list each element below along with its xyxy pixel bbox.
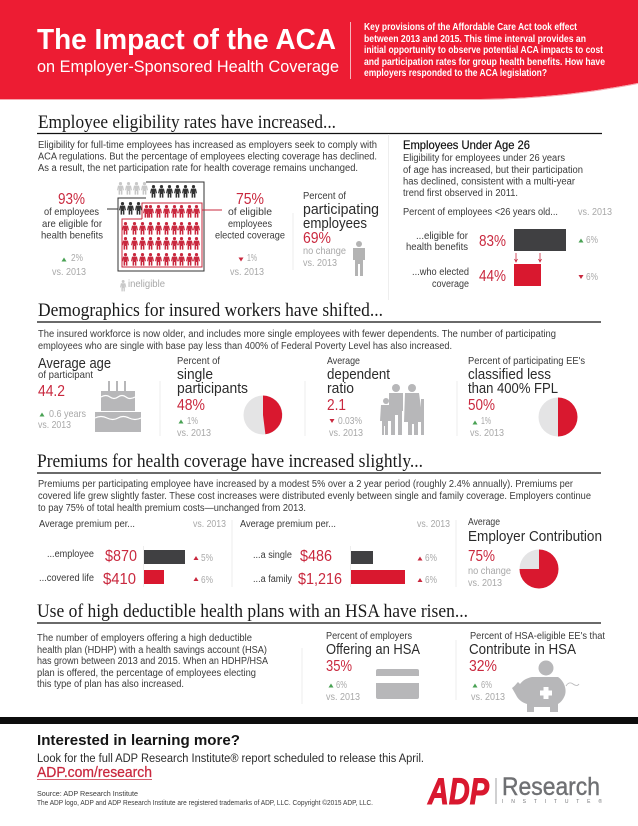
legend: ineligible <box>120 278 165 291</box>
section 1 body text <box>38 140 377 174</box>
section 2 body text: The insured workforce is now older, and includes more single employees with fewer dependents. The number of participating <box>38 329 556 340</box>
icon: family <box>380 384 424 435</box>
panel: employees under age 26: 44% <box>479 268 506 285</box>
bar: eligible <box>514 229 566 251</box>
footer call to action: Look for the full ADP Research Institute® report scheduled to release this April. <box>37 753 424 765</box>
logo: ADP Research Institute: ADP <box>427 771 489 812</box>
stat: employer contribution: Employer Contribution <box>468 529 602 545</box>
chart: premium per employee: $870 <box>105 548 137 565</box>
stat: single participants: single <box>177 367 213 383</box>
header intro text: employers responded to the ACA legislation? <box>364 68 547 79</box>
chart: premium per employee: ...covered life <box>39 573 94 584</box>
stat: single participants <box>177 355 282 439</box>
icon: piggy bank <box>512 660 579 712</box>
header intro text: and participation rates for group health benefits. How have <box>364 57 605 68</box>
pie chart: 75% <box>520 550 558 588</box>
header intro text: initial opportunity to observe potential ACA impacts to cost <box>364 45 604 56</box>
stat: average age: of participant <box>38 369 93 381</box>
chart: premium per employee: vs. 2013 <box>193 518 226 530</box>
panel: employees under age 26 <box>403 138 612 290</box>
panel: employees under age 26: Employees Under Age 26 <box>403 138 530 152</box>
chart: premium per coverage type: Average premium per... <box>240 519 336 530</box>
stat: average age: 0.6 years <box>49 408 86 420</box>
pie chart: 50% <box>538 398 578 436</box>
stat: classified less than 400% FPL: 1% <box>481 415 491 427</box>
stat: participating employees 69%: 69% <box>303 230 331 247</box>
stat: participating employees 69%: vs. 2013 <box>303 257 337 269</box>
stat: classified less than 400% FPL: Percent of participating EE's <box>468 355 585 367</box>
chart: premium per coverage type: 6% <box>425 574 437 586</box>
chart: premium per employee <box>39 518 226 588</box>
stat: 75% elected: employees <box>228 218 272 230</box>
stat: single participants: 48% <box>177 397 205 414</box>
bar: covered life <box>144 570 164 584</box>
footer source notes: Source: ADP Research Institute <box>37 789 138 798</box>
bar: employee <box>144 550 185 564</box>
stat: contribute in HSA <box>469 630 605 712</box>
stat: offering an HSA: Offering an HSA <box>326 642 420 658</box>
chart: premium per coverage type: 6% <box>425 552 437 564</box>
chart: premium per coverage type <box>240 518 450 588</box>
stat: employer contribution: no change <box>468 565 511 577</box>
subtitle: on Employer-Sponsored Health Coverage <box>37 57 339 76</box>
section 3 heading: Premiums for health coverage have increased slightly... <box>37 452 423 472</box>
panel: employees under age 26: has declined, consistent with a multi-year <box>403 176 576 188</box>
stat: classified less than 400% FPL <box>468 355 585 439</box>
section 4 body text <box>37 633 268 690</box>
stat: participating employees 69%: no change <box>303 245 346 257</box>
header intro text <box>364 22 605 79</box>
stat: average age: Average age <box>38 356 111 372</box>
chart: premium per coverage type: ...a family <box>253 574 292 585</box>
chart: premium per employee: 5% <box>201 552 213 564</box>
section 3 body text: Premiums per participating employee have increased by a modest 5% over a 2 year period (roughly 2.4% annually). Premiums per <box>38 479 574 490</box>
stat: 75% elected <box>215 191 285 278</box>
section 3 body text <box>38 479 591 514</box>
stat: dependent ratio: Average <box>327 355 360 367</box>
chart: premium per coverage type: $1,216 <box>298 571 342 588</box>
stat: contribute in HSA: Percent of HSA-eligible EE's that <box>470 630 605 642</box>
stat: classified less than 400% FPL: vs. 2013 <box>470 427 504 439</box>
section 1 heading: Employee eligibility rates have increased... <box>38 113 336 133</box>
header intro text: Key provisions of the Affordable Care Act took effect <box>364 22 578 33</box>
chart: premium per employee: Average premium per... <box>39 519 135 530</box>
logo: ADP Research Institute: Research <box>502 773 600 801</box>
footer call to action: Interested in learning more? <box>37 732 240 749</box>
stat: employer contribution: 75% <box>468 548 495 565</box>
chart: premium per employee: $410 <box>103 571 136 588</box>
legend: ineligible: ineligible <box>128 278 165 290</box>
panel: employees under age 26: coverage <box>432 279 469 290</box>
chart: premium per coverage type: ...a single <box>253 550 292 561</box>
stat: 93% eligible <box>41 191 103 278</box>
stat: contribute in HSA: Contribute in HSA <box>469 642 576 658</box>
icon: person <box>353 241 365 276</box>
stat: dependent ratio: vs. 2013 <box>329 427 363 439</box>
chart: premium per employee: 6% <box>201 574 213 586</box>
section 4 body text: this type of plan has also increased. <box>37 679 184 690</box>
stat: 75% elected: of eligible <box>228 206 272 218</box>
stat: 75% elected: elected coverage <box>215 230 285 242</box>
section 2 heading: Demographics for insured workers have shifted... <box>38 301 383 321</box>
section 1 body text: As a result, the net participation rate for health coverage remains unchanged. <box>38 163 358 174</box>
stat: classified less than 400% FPL: 50% <box>468 397 495 414</box>
stat: average age: 44.2 <box>38 383 65 400</box>
panel: employees under age 26: 6% <box>586 234 598 246</box>
stat: employer contribution <box>468 517 602 589</box>
panel: employees under age 26: Percent of employees <26 years old... <box>403 207 558 218</box>
stat: offering an HSA: 6% <box>336 679 347 691</box>
stat: single participants: 1% <box>187 415 198 427</box>
panel: employees under age 26: vs. 2013 <box>578 206 612 218</box>
stat: 75% elected: 1% <box>247 252 257 264</box>
stat: contribute in HSA: 32% <box>469 658 497 675</box>
chart: premium per employee: ...employee <box>47 549 94 560</box>
stat: offering an HSA: Percent of employers <box>326 630 412 642</box>
stat: single participants: participants <box>177 381 248 397</box>
stat: employer contribution: Average <box>468 517 500 528</box>
stat: dependent ratio: 0.03% <box>338 415 362 427</box>
bar: family <box>351 570 405 584</box>
icon: credit card <box>376 669 419 699</box>
stat: 93% eligible: vs. 2013 <box>52 266 86 278</box>
section 1 body text: ACA regulations. But the percentage of employees electing coverage has declined. <box>38 152 377 162</box>
stat: 93% eligible: 2% <box>71 252 83 264</box>
pie chart: 48% <box>244 396 282 434</box>
stat: 93% eligible: of employees <box>44 206 99 218</box>
stat: dependent ratio: dependent <box>327 367 390 383</box>
panel: employees under age 26: ...who elected <box>412 267 469 278</box>
stat: 93% eligible: health benefits <box>41 230 103 242</box>
section 1 body text: Eligibility for full-time employees has increased as employers seek to comply with <box>38 140 377 151</box>
stat: participating employees 69%: participating <box>303 202 379 218</box>
stat: contribute in HSA: 6% <box>481 679 492 691</box>
stat: participating employees 69%: Percent of <box>303 190 346 202</box>
panel: employees under age 26: 83% <box>479 233 506 250</box>
header banner <box>0 0 638 100</box>
section 2 body text: employees who are single with base pay less than 400% of Federal Poverty Level has also increased. <box>38 341 452 352</box>
section 4 body text: health plan (HDHP) with a health savings account (HSA) <box>37 645 267 656</box>
stat: 93% eligible: are eligible for <box>42 218 102 230</box>
panel: employees under age 26: trend first observed in 2011. <box>403 188 518 199</box>
section 4 body text: plan is offered, the percentage of employees electing <box>37 668 256 679</box>
stat: offering an HSA: vs. 2013 <box>326 691 360 703</box>
stat: classified less than 400% FPL: than 400% FPL <box>468 381 558 397</box>
section 3 body text: covered life grew slightly faster. These cost increases were distributed evenly between single and family coverage. Employers continue <box>38 491 591 502</box>
footer source notes <box>37 789 373 807</box>
footer source notes: The ADP logo, ADP and ADP Research Institute are registered trademarks of ADP, LLC. Copyright ©2015 ADP, LLC. <box>37 798 373 807</box>
stat: average age <box>38 356 141 432</box>
stat: participating employees 69% <box>303 190 379 276</box>
stat: single participants: vs. 2013 <box>177 427 211 439</box>
bar: single <box>351 551 373 564</box>
section 4 heading: Use of high deductible health plans with an HSA have risen... <box>37 602 468 622</box>
stat: 75% elected: 75% <box>236 191 264 208</box>
panel: employees under age 26: of age has increased, but their participation <box>403 165 583 176</box>
stat: employer contribution: vs. 2013 <box>468 577 502 589</box>
logo: ADP Research Institute <box>427 771 602 812</box>
stat: average age: vs. 2013 <box>38 419 71 431</box>
chart: premium per coverage type: vs. 2013 <box>417 518 450 530</box>
stat: dependent ratio <box>327 355 424 439</box>
footer band <box>0 717 638 724</box>
pictogram: employee grid <box>107 182 222 271</box>
section 4 body text: has grown between 2013 and 2015. When an HDHP/HSA <box>37 656 268 667</box>
title: The Impact of the ACA <box>37 24 336 56</box>
chart: premium per coverage type: $486 <box>300 548 332 565</box>
section 2 body text <box>38 329 556 352</box>
logo: ADP Research Institute: INSTITUTE® <box>502 798 602 805</box>
panel: employees under age 26: ...eligible for <box>416 231 469 242</box>
section 4 body text: The number of employers offering a high deductible <box>37 633 252 644</box>
stat: classified less than 400% FPL: classified less <box>468 367 551 383</box>
bar: elected <box>514 264 541 286</box>
stat: single participants: Percent of <box>177 355 220 367</box>
panel: employees under age 26: health benefits <box>406 242 468 253</box>
stat: dependent ratio: 2.1 <box>327 397 346 414</box>
footer call to action <box>37 732 424 781</box>
header intro text: between 2013 and 2015. This time interval provides an <box>364 34 586 45</box>
panel: employees under age 26: 6% <box>586 271 598 283</box>
stat: participating employees 69%: employees <box>303 216 367 232</box>
section 3 body text: to pay 75% of total health premium costs—unchanged from 2013. <box>38 503 306 514</box>
stat: 93% eligible: 93% <box>58 191 85 208</box>
stat: offering an HSA: 35% <box>326 658 352 675</box>
stat: dependent ratio: ratio <box>327 381 354 397</box>
stat: contribute in HSA: vs. 2013 <box>471 691 505 703</box>
panel: employees under age 26: Eligibility for employees under 26 years <box>403 153 565 164</box>
stat: 75% elected: vs. 2013 <box>230 266 264 278</box>
footer call to action: ADP.com/research <box>37 764 152 781</box>
icon: cake <box>95 381 141 432</box>
stat: offering an HSA <box>326 630 420 703</box>
